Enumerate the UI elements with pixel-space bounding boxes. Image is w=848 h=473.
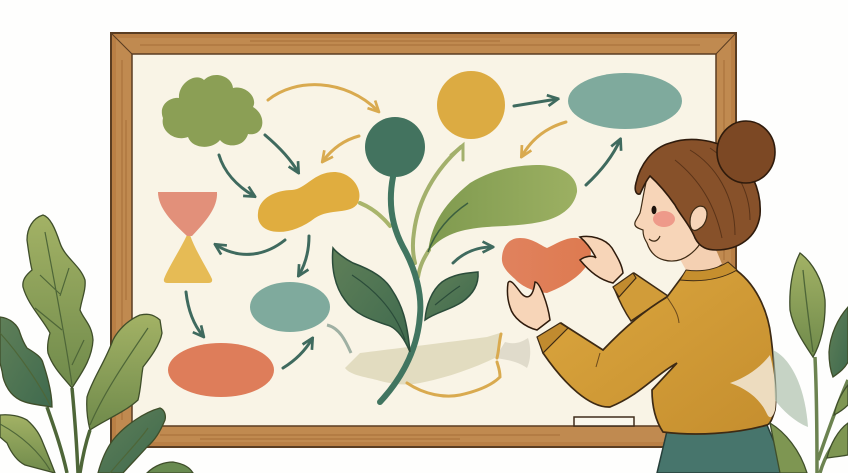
leaf: dark right xyxy=(425,272,478,320)
eye xyxy=(652,206,656,214)
arrow: up to oval xyxy=(586,140,620,185)
arrow: blob down to teal oval xyxy=(299,236,309,275)
arrow: leaf to heart xyxy=(453,247,492,263)
beige patch on sweater xyxy=(730,355,776,417)
board frame xyxy=(111,33,736,447)
shape: yellow blob xyxy=(258,172,360,232)
shape: green cloud xyxy=(162,75,262,147)
tall leaf xyxy=(790,253,825,357)
plant: right xyxy=(770,253,848,473)
rosy cheek xyxy=(653,211,675,227)
sleeve cuffs xyxy=(537,273,636,353)
shape: dark teal circle xyxy=(365,117,425,177)
hair bun xyxy=(717,121,775,183)
arrow: cloud down to blob xyxy=(219,155,254,196)
plant: left xyxy=(0,215,193,473)
shape: teal oval xyxy=(568,73,682,129)
shape: yellow circle xyxy=(437,71,505,139)
trousers xyxy=(657,425,787,473)
left plant veins xyxy=(0,232,148,473)
arrow: blob to hourglass xyxy=(216,240,285,254)
arrow: circle to blob xyxy=(323,136,359,161)
left plant stems xyxy=(47,388,90,473)
ear xyxy=(690,206,707,230)
hand: lower xyxy=(507,281,550,330)
big upper leaf xyxy=(23,215,93,388)
person xyxy=(507,121,787,473)
shape: small teal oval xyxy=(250,282,330,332)
hand: upper xyxy=(580,236,623,283)
arrow: oval to leaf xyxy=(522,122,566,156)
arrow: orange oval to teal oval xyxy=(283,339,312,368)
sweater collar xyxy=(680,262,737,281)
arrow: cloud to blob right xyxy=(265,135,298,172)
leaf: large green xyxy=(428,165,577,252)
lower right leaf xyxy=(834,385,848,415)
face xyxy=(635,168,709,261)
sweater body and front arm xyxy=(538,264,776,434)
right plant stems xyxy=(815,357,848,473)
leaf: dark left xyxy=(332,248,410,352)
shape: orange heart xyxy=(502,238,591,293)
smile xyxy=(649,236,660,241)
shape: orange oval xyxy=(168,343,274,397)
rear arm sleeve xyxy=(614,273,668,321)
bottom left leaf of right plant xyxy=(770,423,807,473)
left dark leaf xyxy=(0,317,52,407)
arrow: hourglass to orange oval xyxy=(186,292,203,336)
shape: hourglass xyxy=(158,192,217,283)
hair xyxy=(635,139,760,250)
hair strands xyxy=(675,148,750,238)
arrow: cloud to circle xyxy=(268,85,378,111)
board tray xyxy=(574,417,634,426)
arrow: yellow circle to oval xyxy=(514,99,557,106)
right plant vein xyxy=(803,270,813,352)
right light leaf xyxy=(87,314,162,430)
right dark leaf xyxy=(829,307,848,377)
bottom left leaf xyxy=(0,415,55,473)
bottom right leaf xyxy=(827,423,848,458)
bottom edge leaf xyxy=(147,462,193,473)
translucent leaf behind sweater xyxy=(773,350,808,427)
plant stems and light arrow xyxy=(360,145,463,402)
faded smudge with curved arrow xyxy=(327,325,530,396)
neck xyxy=(672,240,722,272)
bottom dark leaf xyxy=(98,408,165,473)
